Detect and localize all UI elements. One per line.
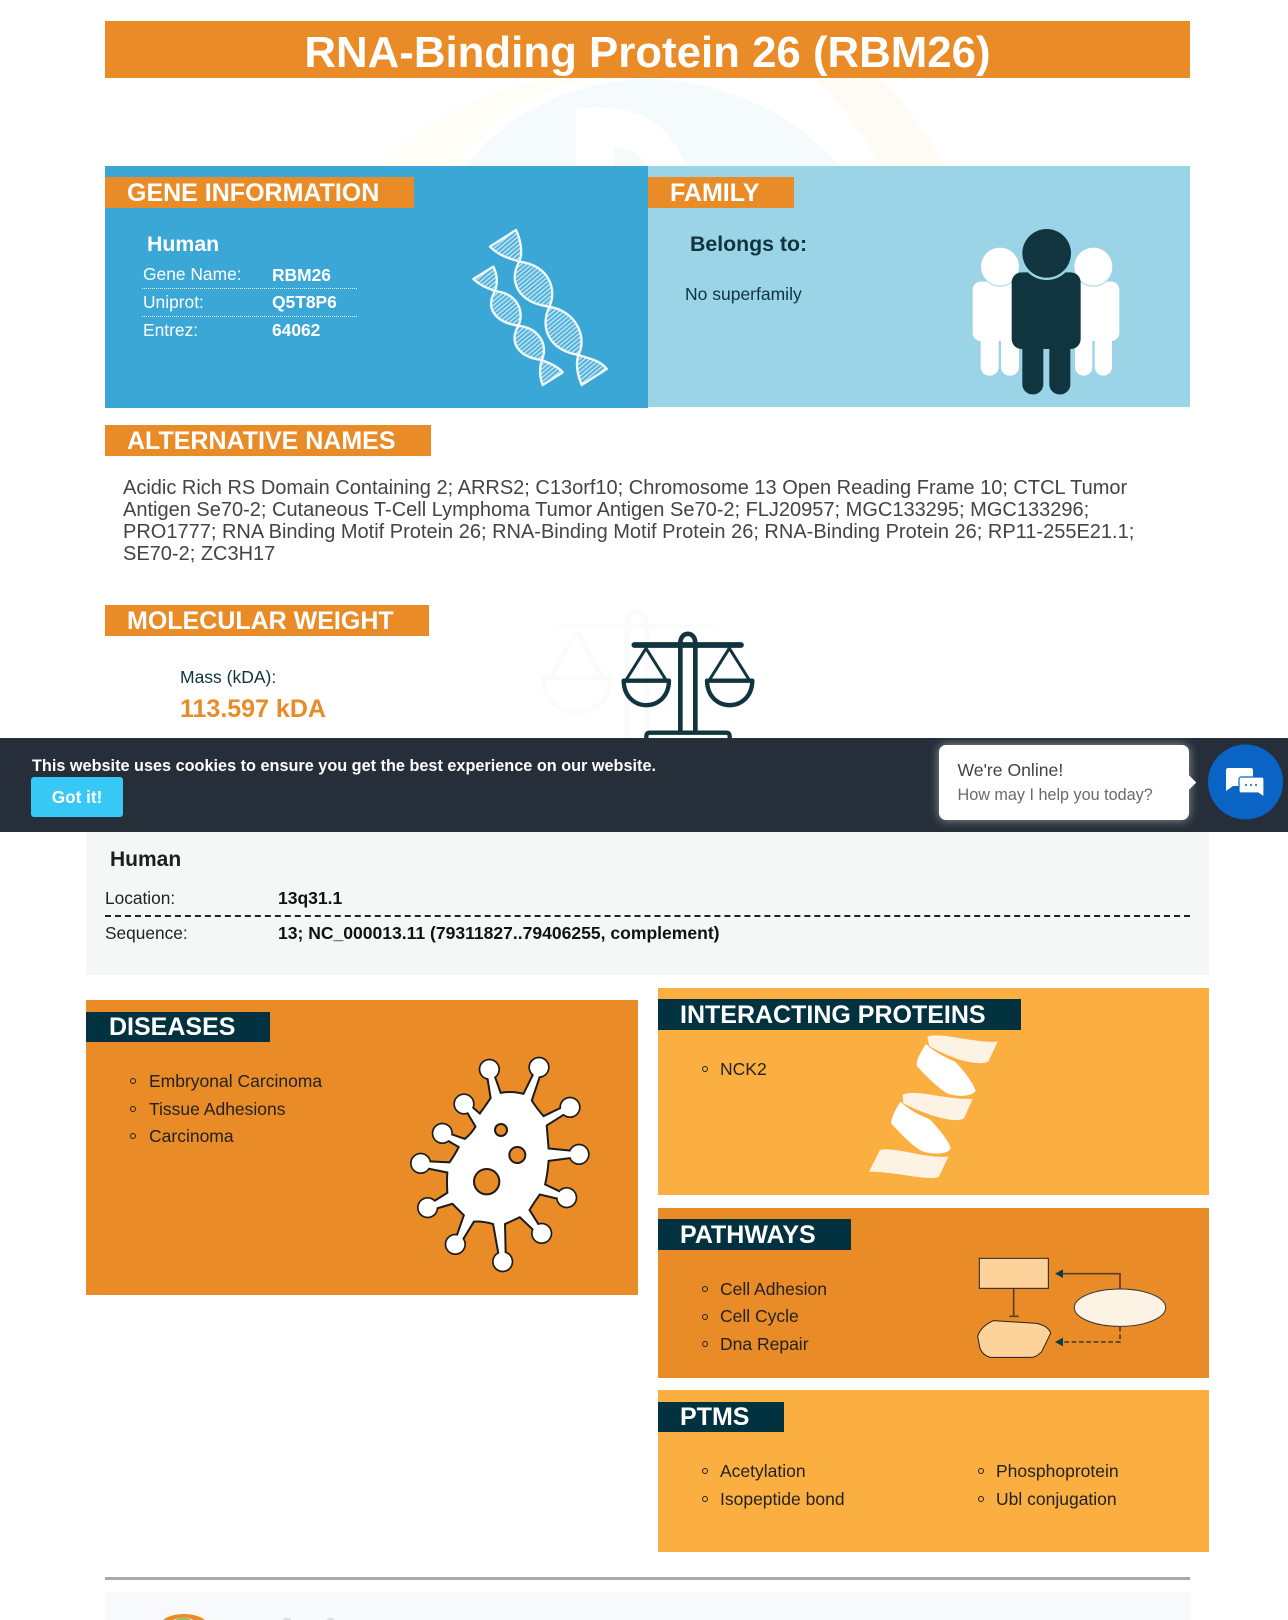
PTMs list left column: Isopeptide bond <box>720 1489 845 1509</box>
location row: 13q31.1 <box>278 888 342 908</box>
interacting proteins list: NCK2 <box>720 1059 767 1079</box>
panel: interacting proteins <box>658 988 1209 1195</box>
heading: pathways: PATHWAYS <box>680 1221 816 1249</box>
disease list: Carcinoma <box>149 1126 234 1146</box>
cookie button <box>31 777 123 817</box>
heading: diseases <box>86 1012 270 1042</box>
title text: RNA-Binding Protein 26 (RBM26) <box>304 28 991 77</box>
footer logo text fragments <box>283 1618 334 1620</box>
cookie banner <box>0 738 1288 832</box>
icon: protein ribbon <box>869 1035 998 1178</box>
text: alternative names list: PRO1777; RNA Binding Motif Protein 26; RNA-Binding Motif Protein 26; RNA-Binding Protein 26; RP11-255E21.1; <box>123 521 1134 543</box>
gene details table: RBM26 <box>272 265 331 285</box>
disease list: Tissue Adhesions <box>149 1099 286 1119</box>
location row <box>105 888 342 908</box>
cookie message: This website uses cookies to ensure you get the best experience on our website. <box>32 757 656 775</box>
panel: gene information <box>105 166 648 408</box>
text: alternative names list: Antigen Se70-2; Cutaneous T-Cell Lymphoma Tumor Antigen Se70-2; FLJ20957; MGC133295; MGC133296; <box>123 499 1089 521</box>
heading: diseases: DISEASES <box>109 1013 235 1041</box>
text: alternative names list: Acidic Rich RS Domain Containing 2; ARRS2; C13orf10; Chromosome 13 Open Reading Frame 10; CTCL Tumor <box>123 477 1127 499</box>
chat bubble <box>939 745 1189 820</box>
heading: PTMs <box>658 1402 784 1432</box>
icon: virus <box>410 1056 590 1272</box>
chat heading: We're Online! <box>958 760 1063 780</box>
heading: gene information: GENE INFORMATION <box>127 179 379 207</box>
disease list: Embryonal Carcinoma <box>149 1071 322 1091</box>
gene details table <box>142 264 357 340</box>
sequence row: 13; NC_000013.11 (79311827..79406255, complement) <box>278 923 720 943</box>
pathways list: Dna Repair <box>720 1334 809 1354</box>
gene details table: Gene Name: <box>143 264 242 284</box>
panel: diseases <box>86 1000 638 1295</box>
watermark: scales <box>530 600 770 740</box>
gene details table: Uniprot: <box>143 292 204 312</box>
bubble pointer <box>1181 775 1196 790</box>
label: mass: Mass (kDA): <box>180 667 276 687</box>
heading: interacting proteins: INTERACTING PROTEINS <box>680 1001 986 1029</box>
pathways list <box>702 1279 827 1354</box>
panel: footer <box>105 1592 1190 1620</box>
value: mass: 113.597 kDA <box>180 695 326 723</box>
disease list <box>130 1071 322 1146</box>
icon: DNA helices <box>472 228 608 386</box>
footer logo <box>163 1614 205 1620</box>
family value: No superfamily <box>685 284 802 304</box>
PTMs list left column <box>702 1461 845 1509</box>
heading: family: FAMILY <box>670 179 759 207</box>
PTMs list left column: Acetylation <box>720 1461 806 1481</box>
gene details table: Q5T8P6 <box>272 292 337 312</box>
PTMs list right column: Phosphoprotein <box>996 1461 1119 1481</box>
icon: chat button <box>1208 744 1283 820</box>
PTMs list right column <box>978 1461 1119 1509</box>
location row: Location: <box>105 888 175 908</box>
panel: family <box>648 166 1190 407</box>
sequence row: Sequence: <box>105 923 188 943</box>
chat prompt: How may I help you today? <box>958 786 1153 804</box>
panel: chromosome location <box>86 832 1209 975</box>
species label: Human <box>147 232 219 256</box>
heading: molecular weight: MOLECULAR WEIGHT <box>127 607 394 635</box>
heading: alternative names: ALTERNATIVE NAMES <box>127 427 396 455</box>
belongs to label: Belongs to: <box>690 232 807 256</box>
gene details table: Entrez: <box>143 320 198 340</box>
species label: Human <box>110 848 181 871</box>
heading: pathways <box>658 1219 851 1250</box>
panel: pathways <box>658 1208 1209 1378</box>
background watermark logo <box>384 78 946 166</box>
pathways list: Cell Cycle <box>720 1306 799 1326</box>
text: alternative names list <box>123 477 1134 565</box>
cookie button: Got it! <box>52 787 102 807</box>
icon: weighing scales <box>622 632 754 738</box>
heading: family <box>648 177 794 208</box>
title banner <box>105 21 1190 78</box>
icon: pathway diagram <box>977 1258 1166 1358</box>
gene details table: 64062 <box>272 320 320 340</box>
icon: group of people <box>972 229 1120 394</box>
text: alternative names list: SE70-2; ZC3H17 <box>123 543 275 565</box>
pathways list: Cell Adhesion <box>720 1279 827 1299</box>
heading: PTMs: PTMS <box>680 1403 749 1431</box>
PTMs list right column: Ubl conjugation <box>996 1489 1117 1509</box>
panel: PTMs <box>658 1390 1209 1552</box>
